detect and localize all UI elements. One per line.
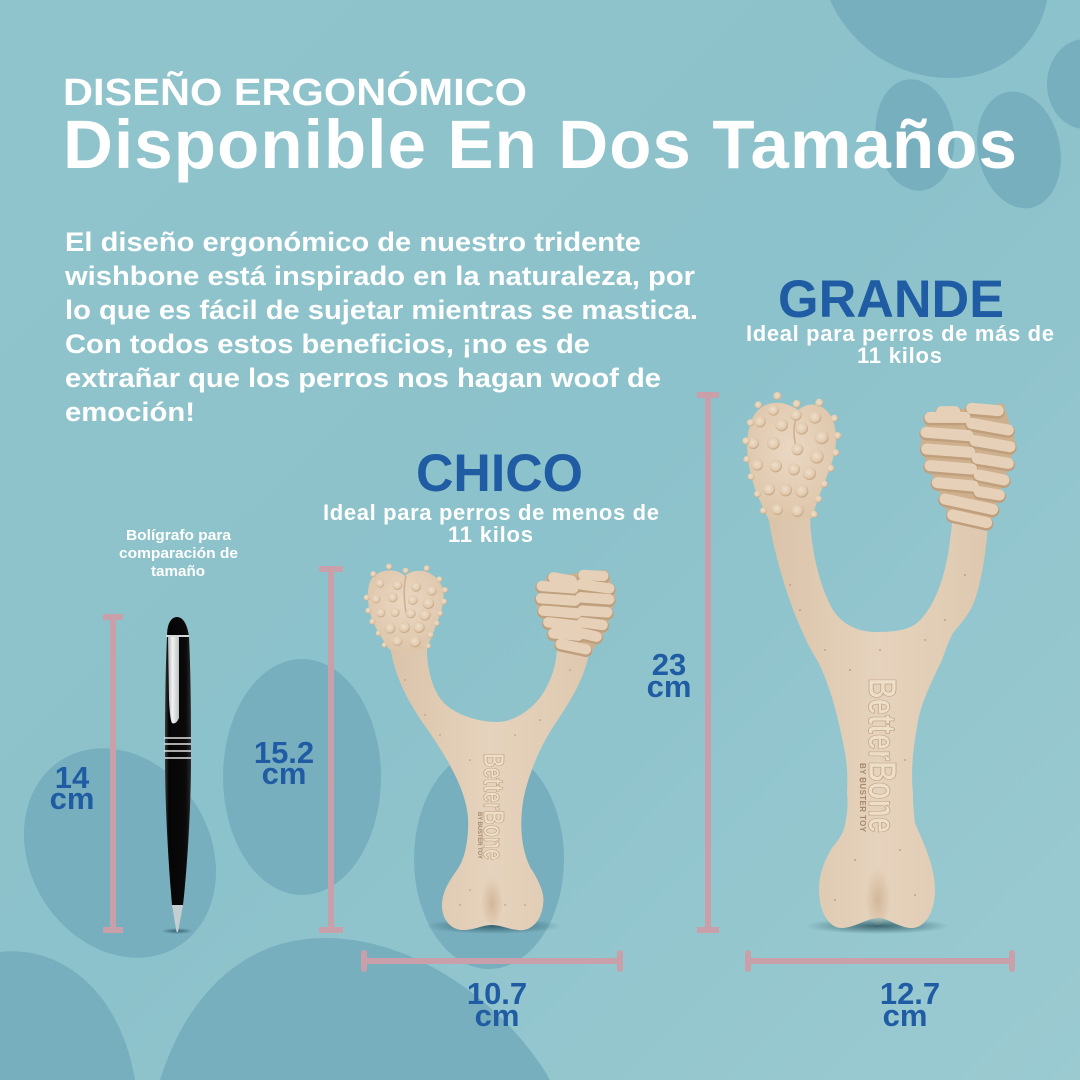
measure: grande height: cm (647, 669, 691, 704)
embossed brand: chico: BetterBone (477, 753, 509, 860)
bumpy head: grande (742, 392, 841, 521)
description paragraph: extrañar que los perros nos hagan woof de (65, 363, 661, 393)
pen caption: tamaño (151, 563, 205, 580)
description paragraph: wishbone está inspirado en la naturaleza, por (64, 261, 696, 291)
chew toy: grande (742, 392, 1016, 934)
ridged head: grande (920, 403, 1016, 525)
chew toy: chico (364, 564, 616, 934)
heading: grande: Ideal para perros de más de (746, 321, 1054, 346)
heading: chico: CHICO (416, 444, 583, 503)
measure: grande width (745, 950, 1015, 1033)
heading: grande: 11 kilos (857, 343, 942, 368)
measure: pen height: 14 (55, 760, 90, 795)
measure: grande height: 23 (652, 647, 686, 682)
measure: grande width: cm (883, 998, 927, 1033)
heading: grande (746, 270, 1054, 368)
title: DISEÑO ERGONÓMICO (63, 70, 527, 114)
measure: chico width: cm (475, 998, 519, 1033)
pen caption (119, 527, 238, 580)
bumpy head: chico (364, 564, 448, 651)
embossed brand: chico (476, 753, 509, 860)
measure: chico height: 15.2 (254, 735, 314, 770)
measure: pen height (50, 617, 123, 930)
heading: chico (323, 444, 659, 547)
description paragraph (64, 227, 698, 427)
icon: pen (161, 617, 193, 934)
title (63, 70, 1017, 183)
heading: grande: GRANDE (778, 270, 1004, 329)
measure: chico width (361, 950, 623, 1033)
description paragraph: emoción! (65, 397, 195, 427)
ridged head: chico (537, 570, 616, 652)
heading: chico: 11 kilos (448, 522, 533, 547)
measure: pen height: cm (50, 781, 94, 816)
measure: grande height (647, 395, 719, 930)
description paragraph: Con todos estos beneficios, ¡no es de (65, 329, 590, 359)
measure: grande width: 12.7 (880, 976, 940, 1011)
measure: chico height (254, 569, 343, 930)
description paragraph: El diseño ergonómico de nuestro tridente (65, 227, 641, 257)
measure: chico width: 10.7 (467, 976, 527, 1011)
embossed brand: grande: BY BUSTER TOY (858, 763, 867, 833)
title: Disponible En Dos Tamaños (63, 106, 1017, 183)
embossed brand: grande: BetterBone (860, 678, 903, 833)
description paragraph: lo que es fácil de sujetar mientras se mastica. (65, 295, 698, 325)
pen caption: comparación de (119, 545, 238, 562)
measure: chico height: cm (262, 756, 306, 791)
embossed brand: chico: BY BUSTER TOY (476, 812, 482, 859)
pen caption: Bolígrafo para (126, 527, 232, 544)
heading: chico: Ideal para perros de menos de (323, 500, 659, 525)
